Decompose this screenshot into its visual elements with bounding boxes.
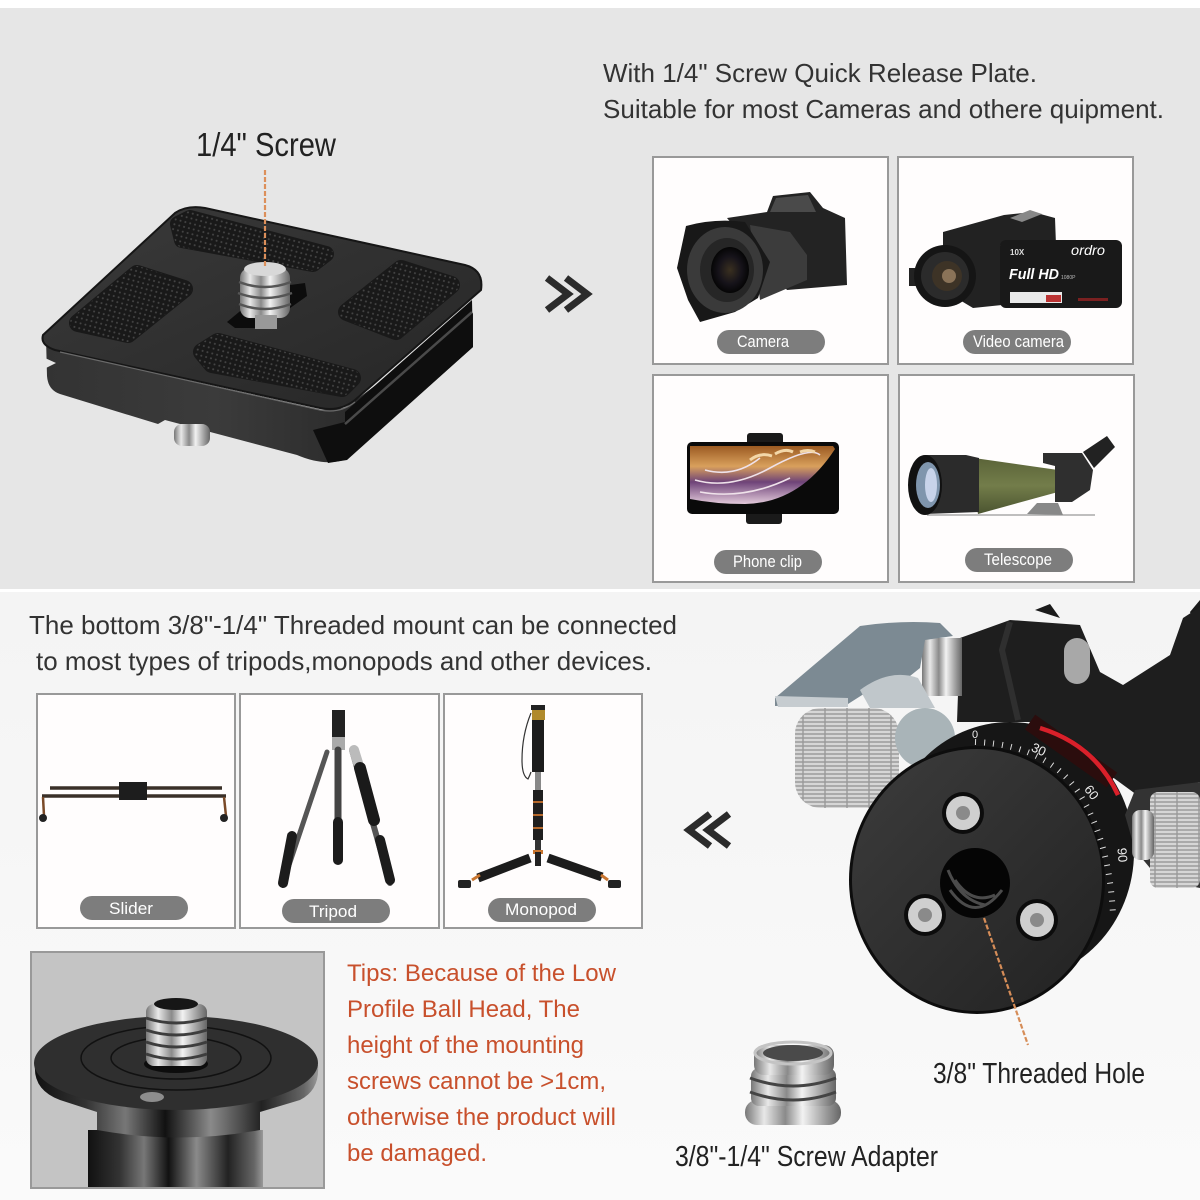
icon: video camera: 10X xyxy=(1010,248,1025,257)
icon: ball head: 0 xyxy=(972,729,978,741)
text: tips xyxy=(347,960,617,1167)
panel: camera xyxy=(653,157,888,364)
arrow: screw callout line xyxy=(264,170,266,268)
panel: telescope xyxy=(899,375,1134,582)
label: slider xyxy=(80,896,188,920)
label: telescope: Telescope xyxy=(984,550,1052,569)
text: plate description: With 1/4" Screw Quick Release Plate. xyxy=(603,58,1037,88)
icon: video camera: Full HD xyxy=(1009,266,1059,283)
label: monopod: Monopod xyxy=(505,900,577,919)
panel: slider xyxy=(37,694,235,928)
text: tips: Tips: Because of the Low xyxy=(347,960,617,987)
icon: quick release plate xyxy=(42,170,481,463)
icon: ball head: 60 xyxy=(1081,782,1102,803)
label: camera: Camera xyxy=(737,332,789,351)
icon: ball head xyxy=(775,600,1200,1045)
label: video camera xyxy=(963,330,1071,354)
text: plate description: Suitable for most Cameras and othere quipment. xyxy=(603,94,1164,124)
icon: video camera xyxy=(909,210,1122,308)
text: tips: Profile Ball Head, The xyxy=(347,996,580,1023)
icon: video camera: ordro xyxy=(1071,242,1105,258)
icon: telescope xyxy=(908,436,1115,515)
heading: 1/4 screw: 1/4" Screw xyxy=(196,126,336,163)
icon: slider xyxy=(39,782,228,822)
text: mount description: to most types of tripods,monopods and other devices. xyxy=(36,646,652,676)
label: phone clip: Phone clip xyxy=(733,552,802,571)
text: tips: height of the mounting xyxy=(347,1032,584,1059)
label: tripod: Tripod xyxy=(309,902,357,921)
icon: video camera: 1080P xyxy=(1061,275,1076,281)
text: tips: otherwise the product will xyxy=(347,1104,616,1131)
text: mount description xyxy=(29,610,677,676)
panel: tripod xyxy=(240,694,439,928)
label: screw adapter: 3/8"-1/4" Screw Adapter xyxy=(675,1141,938,1173)
panel: monopod xyxy=(444,694,642,928)
panel: mounting screw photo xyxy=(31,952,324,1188)
label: tripod xyxy=(282,899,390,923)
label: camera xyxy=(717,330,825,354)
arrow: left chevrons xyxy=(689,814,729,846)
panel: top background xyxy=(0,8,1200,589)
icon: screw adapter xyxy=(745,1042,841,1125)
text: tips: be damaged. xyxy=(347,1140,487,1167)
label: telescope xyxy=(965,548,1073,572)
icon: phone clip xyxy=(687,433,839,524)
icon: tripod xyxy=(283,710,390,883)
panel: bottom background xyxy=(0,592,1200,1200)
label: slider: Slider xyxy=(109,899,153,918)
arrow: threaded hole callout line xyxy=(984,918,1028,1045)
text: plate description xyxy=(603,58,1164,124)
label: video camera: Video camera xyxy=(973,332,1064,351)
text: tips: screws cannot be >1cm, xyxy=(347,1068,606,1095)
icon: ball head: 90 xyxy=(1114,847,1131,863)
arrow: right chevrons xyxy=(547,278,587,310)
label: monopod xyxy=(488,898,596,922)
icon: camera xyxy=(677,192,847,322)
icon: monopod xyxy=(458,705,621,888)
panel: phone clip xyxy=(653,375,888,582)
text: mount description: The bottom 3/8"-1/4" Threaded mount can be connected xyxy=(29,610,677,640)
label: phone clip xyxy=(714,550,822,574)
label: threaded hole: 3/8" Threaded Hole xyxy=(933,1058,1145,1090)
panel: video camera xyxy=(898,157,1133,364)
icon: ball head: 30 xyxy=(1029,740,1049,759)
